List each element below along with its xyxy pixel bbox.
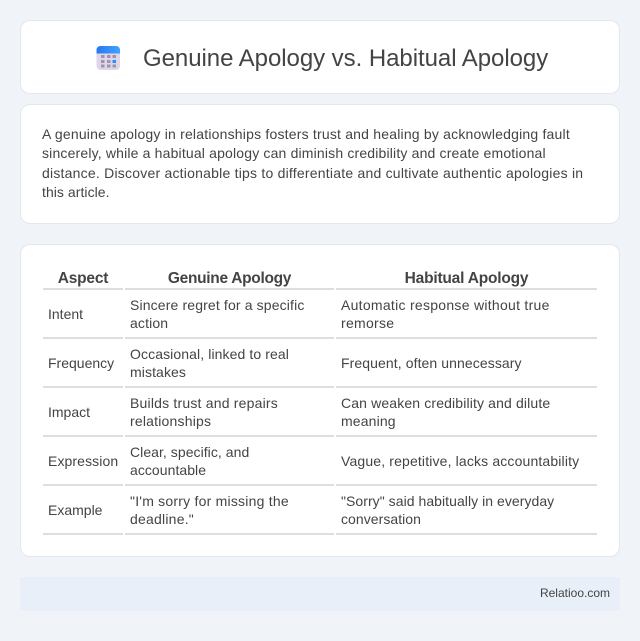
row: expression: Clear, specific, and [130,444,249,460]
icon: calendar [96,46,120,70]
row: frequency: Frequency [48,355,114,371]
row: example: Example [48,502,102,518]
row: impact: Impact [48,404,90,420]
row: frequency: mistakes [130,364,186,380]
row: intent [48,297,550,331]
description text: this article. [42,184,110,200]
table header: Aspect [58,270,108,287]
footer brand text: Relatioo.com [540,586,610,600]
row: example: "Sorry" said habitually in everyday [341,493,554,509]
panel: header [20,20,620,94]
table header [58,270,528,287]
row: expression: Vague, repetitive, lacks accountability [341,453,579,469]
row: intent: Intent [48,306,83,322]
row: intent: Automatic response without true [341,297,550,313]
panel: description [20,104,620,224]
row: expression: accountable [130,462,206,478]
panel: comparison table [20,244,620,557]
row: example: "I'm sorry for missing the [130,493,289,509]
table header: Habitual Apology [405,270,528,287]
table header: Genuine Apology [168,270,291,287]
description text: distance. Discover actionable tips to differentiate and cultivate authentic apologies in [42,165,583,181]
description text [42,126,583,200]
row: impact: Builds trust and repairs [130,395,278,411]
row: impact: relationships [130,413,211,429]
row: frequency [48,346,522,380]
row: example: deadline." [130,511,194,527]
row: intent: remorse [341,315,394,331]
row: expression: Expression [48,453,118,469]
row: impact [48,395,550,429]
row: intent: Sincere regret for a specific [130,297,304,313]
footer bar [20,577,620,611]
row: intent: action [130,315,168,331]
row: impact: Can weaken credibility and dilute [341,395,550,411]
row: example [48,493,554,527]
description text: A genuine apology in relationships fosters trust and healing by acknowledging fault [42,126,570,142]
row: expression [48,444,580,478]
description text: sincerely, while a habitual apology can diminish credibility and create emotional [42,145,546,161]
row: impact: meaning [341,413,396,429]
row: example: conversation [341,511,421,527]
row: frequency: Frequent, often unnecessary [341,355,522,371]
title: Genuine Apology vs. Habitual Apology [143,45,548,72]
row: frequency: Occasional, linked to real [130,346,289,362]
